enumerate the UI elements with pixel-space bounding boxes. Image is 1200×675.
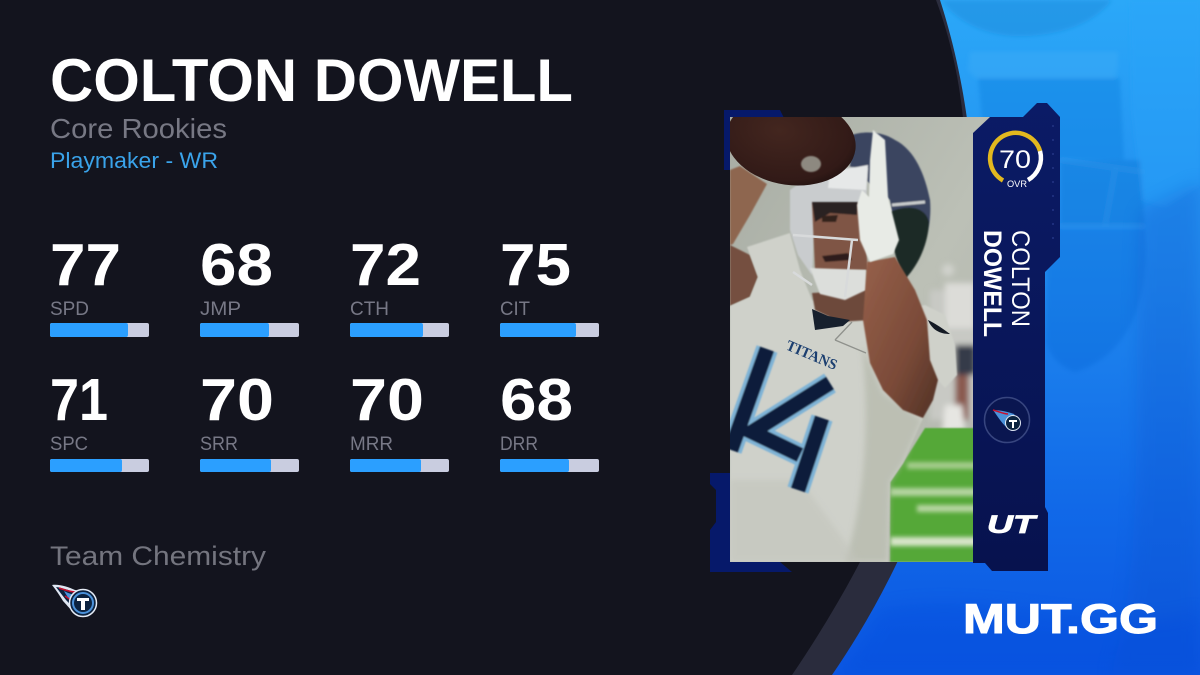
turf — [889, 427, 973, 562]
gloved hand — [857, 130, 899, 262]
stat: SPC: 71 — [50, 367, 108, 433]
stat: CIT: CIT — [500, 299, 530, 320]
subtitle: archetype: Playmaker - WR — [50, 148, 218, 173]
UT badge: UT — [987, 511, 1039, 539]
icon: Titans logo — [52, 585, 96, 616]
collar — [812, 309, 850, 330]
neck — [812, 290, 870, 322]
blurred background — [930, 264, 975, 432]
stat: CTH: 72 — [350, 232, 421, 298]
overall rating gauge — [990, 133, 1041, 190]
stat: SPD: SPD — [50, 299, 89, 320]
stat: CIT — [500, 232, 599, 337]
panel tick marks — [1052, 125, 1054, 250]
card side panel — [973, 103, 1060, 571]
stat: JMP: JMP — [200, 299, 241, 320]
jersey wordmark: TITANS — [783, 338, 839, 374]
stat: DRR: 68 — [500, 367, 573, 433]
subtitle: program: Core Rookies — [50, 113, 227, 144]
jersey — [730, 233, 957, 562]
stat: CIT: 75 — [500, 232, 571, 298]
stat: JMP — [200, 232, 299, 337]
face — [812, 202, 868, 270]
stat: SPC: SPC — [50, 434, 88, 455]
jersey number 14 — [731, 349, 830, 490]
team badge — [984, 398, 1030, 442]
stat: JMP: 68 — [200, 232, 273, 298]
stat: SRR: 70 — [200, 367, 274, 433]
overall rating gauge: OVR — [1007, 179, 1027, 190]
stat: CTH — [350, 232, 449, 337]
stat: MRR: 70 — [350, 367, 424, 433]
card back accent: bottom left — [710, 473, 792, 572]
icon: sleeve swoosh — [928, 320, 950, 334]
football — [730, 117, 856, 186]
stat: DRR — [500, 367, 599, 472]
MUT.GG logo: MUT.GG — [963, 595, 1158, 642]
collar seam — [835, 322, 866, 353]
stat: SPC — [50, 367, 149, 472]
left arm — [730, 166, 767, 306]
chin guard and facemask — [793, 235, 866, 300]
vertical first name: COLTON — [1006, 230, 1034, 327]
title: COLTON DOWELL — [50, 46, 573, 114]
overall rating gauge: 70 — [999, 146, 1031, 174]
vertical last name: DOWELL — [978, 230, 1006, 337]
stat: DRR: DRR — [500, 434, 538, 455]
stat: SRR — [200, 367, 299, 472]
card back accent: top left — [724, 110, 784, 170]
player photo — [730, 117, 990, 562]
stat: SRR: SRR — [200, 434, 238, 455]
helmet — [790, 133, 930, 278]
team chemistry heading: Team Chemistry — [50, 541, 267, 571]
stat: SPD: 77 — [50, 232, 121, 298]
stat: CTH: CTH — [350, 299, 389, 320]
stat: MRR: MRR — [350, 434, 393, 455]
raised forearm — [863, 257, 938, 418]
stat: MRR — [350, 367, 449, 472]
stat: SPD — [50, 232, 149, 337]
